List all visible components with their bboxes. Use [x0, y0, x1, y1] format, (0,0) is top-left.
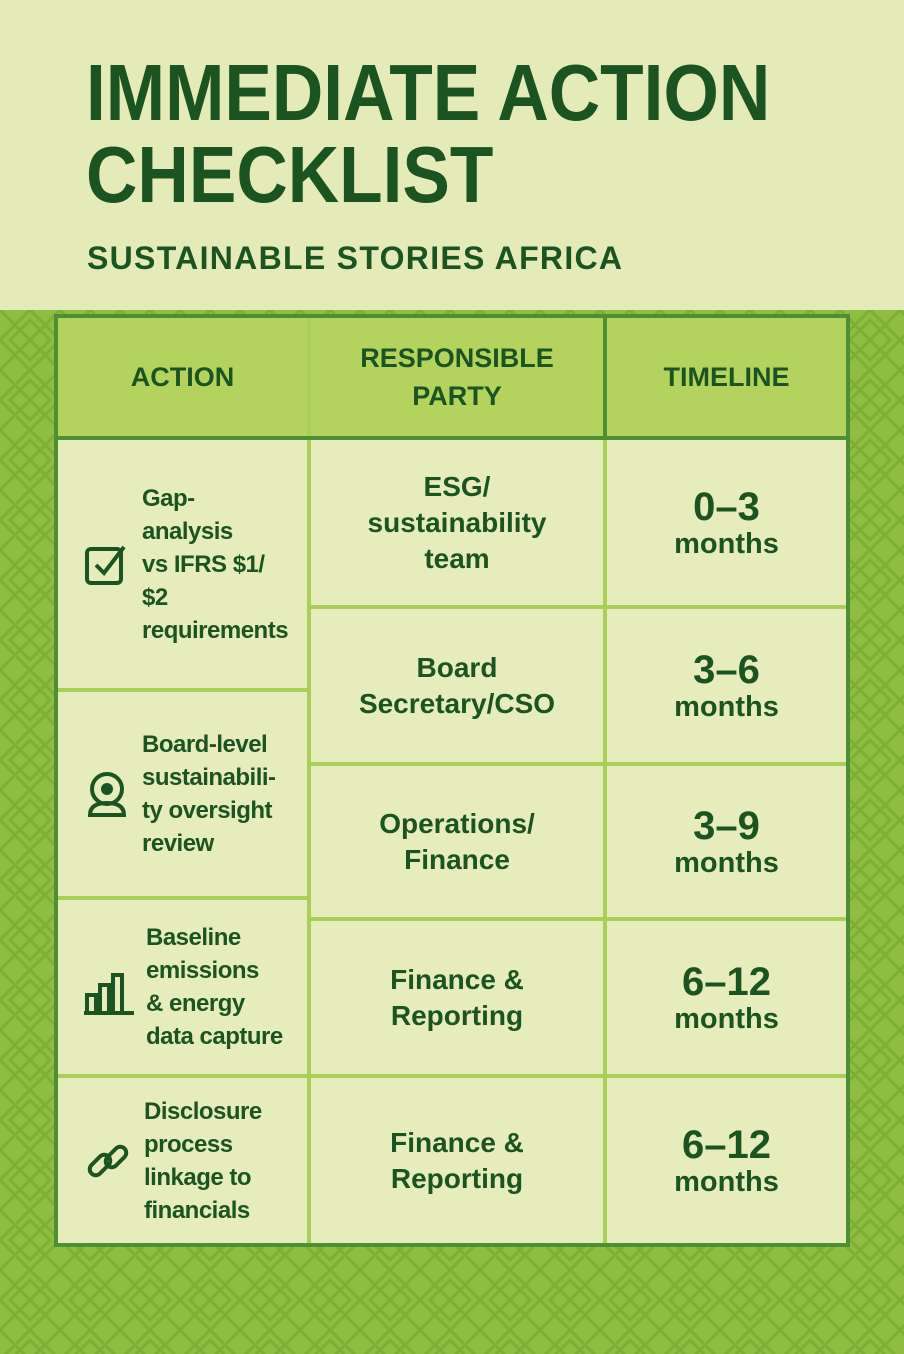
- action 2: review: [142, 830, 214, 857]
- party 5: Reporting: [391, 1162, 523, 1194]
- timeline 1: [607, 440, 846, 605]
- party 3: Operations/: [379, 808, 535, 838]
- action 2: Board-level: [142, 731, 267, 758]
- timeline 1: months: [674, 528, 779, 560]
- timeline 5: 6–12: [682, 1122, 771, 1166]
- header: responsible party: RESPONSIBLE: [360, 343, 554, 373]
- action 3: & energy: [146, 990, 245, 1017]
- action 1: [58, 440, 307, 688]
- subtitle: SUSTAINABLE STORIES AFRICA: [87, 240, 623, 276]
- action 4: [58, 1078, 307, 1243]
- action 3: emissions: [146, 957, 259, 984]
- action 2: sustainabili-: [142, 764, 276, 791]
- party 5: Finance &: [390, 1126, 524, 1158]
- party 2: Secretary/CSO: [359, 688, 555, 718]
- timeline 4: 6–12: [682, 960, 771, 1004]
- action 3: Baseline: [146, 924, 241, 951]
- timeline 3: months: [674, 846, 779, 878]
- header: action: ACTION: [131, 362, 234, 392]
- party 1: sustainability: [368, 506, 546, 538]
- action 2: ty oversight: [142, 797, 272, 824]
- timeline 4: [607, 921, 846, 1074]
- action 4: linkage to: [144, 1164, 251, 1190]
- title: CHECKLIST: [86, 130, 493, 219]
- party 3: [311, 766, 603, 917]
- timeline 3: [607, 766, 846, 917]
- party 4: Finance &: [390, 964, 524, 994]
- header: timeline: [607, 318, 846, 436]
- action 1: requirements: [142, 616, 288, 644]
- party 2: [311, 609, 603, 762]
- action 3: [58, 900, 307, 1074]
- header: action: [58, 318, 307, 436]
- timeline 3: 3–9: [693, 804, 760, 848]
- timeline 1: 0–3: [693, 484, 760, 528]
- party 5: [311, 1078, 603, 1243]
- party 4: [311, 921, 603, 1074]
- action 1: $2: [142, 584, 168, 610]
- action 2: [58, 692, 307, 896]
- title: [86, 48, 770, 219]
- timeline 5: [607, 1078, 846, 1243]
- action 1: vs IFRS $1/: [142, 550, 265, 578]
- title: IMMEDIATE ACTION: [86, 48, 770, 137]
- action 4: Disclosure: [144, 1098, 262, 1124]
- background pattern: [0, 310, 904, 1354]
- action 3: data capture: [146, 1023, 283, 1050]
- party 1: ESG/: [424, 470, 490, 502]
- timeline 2: months: [674, 690, 779, 722]
- timeline 2: [607, 609, 846, 762]
- table: [54, 314, 850, 1247]
- action 1: analysis: [142, 518, 233, 544]
- action 4: process: [144, 1130, 233, 1158]
- action 1: Gap-: [142, 484, 195, 512]
- header: timeline: TIMELINE: [664, 362, 790, 392]
- party 4: Reporting: [391, 1000, 523, 1030]
- party 2: Board: [417, 652, 497, 682]
- timeline 2: 3–6: [693, 648, 760, 692]
- action 4: financials: [144, 1196, 250, 1224]
- timeline 5: months: [674, 1166, 779, 1198]
- header: responsible party: [311, 318, 603, 436]
- timeline 4: months: [674, 1002, 779, 1034]
- party 1: [311, 440, 603, 605]
- header: responsible party: PARTY: [412, 381, 502, 411]
- header band: [0, 0, 904, 310]
- party 1: team: [424, 542, 490, 574]
- party 3: Finance: [404, 844, 510, 874]
